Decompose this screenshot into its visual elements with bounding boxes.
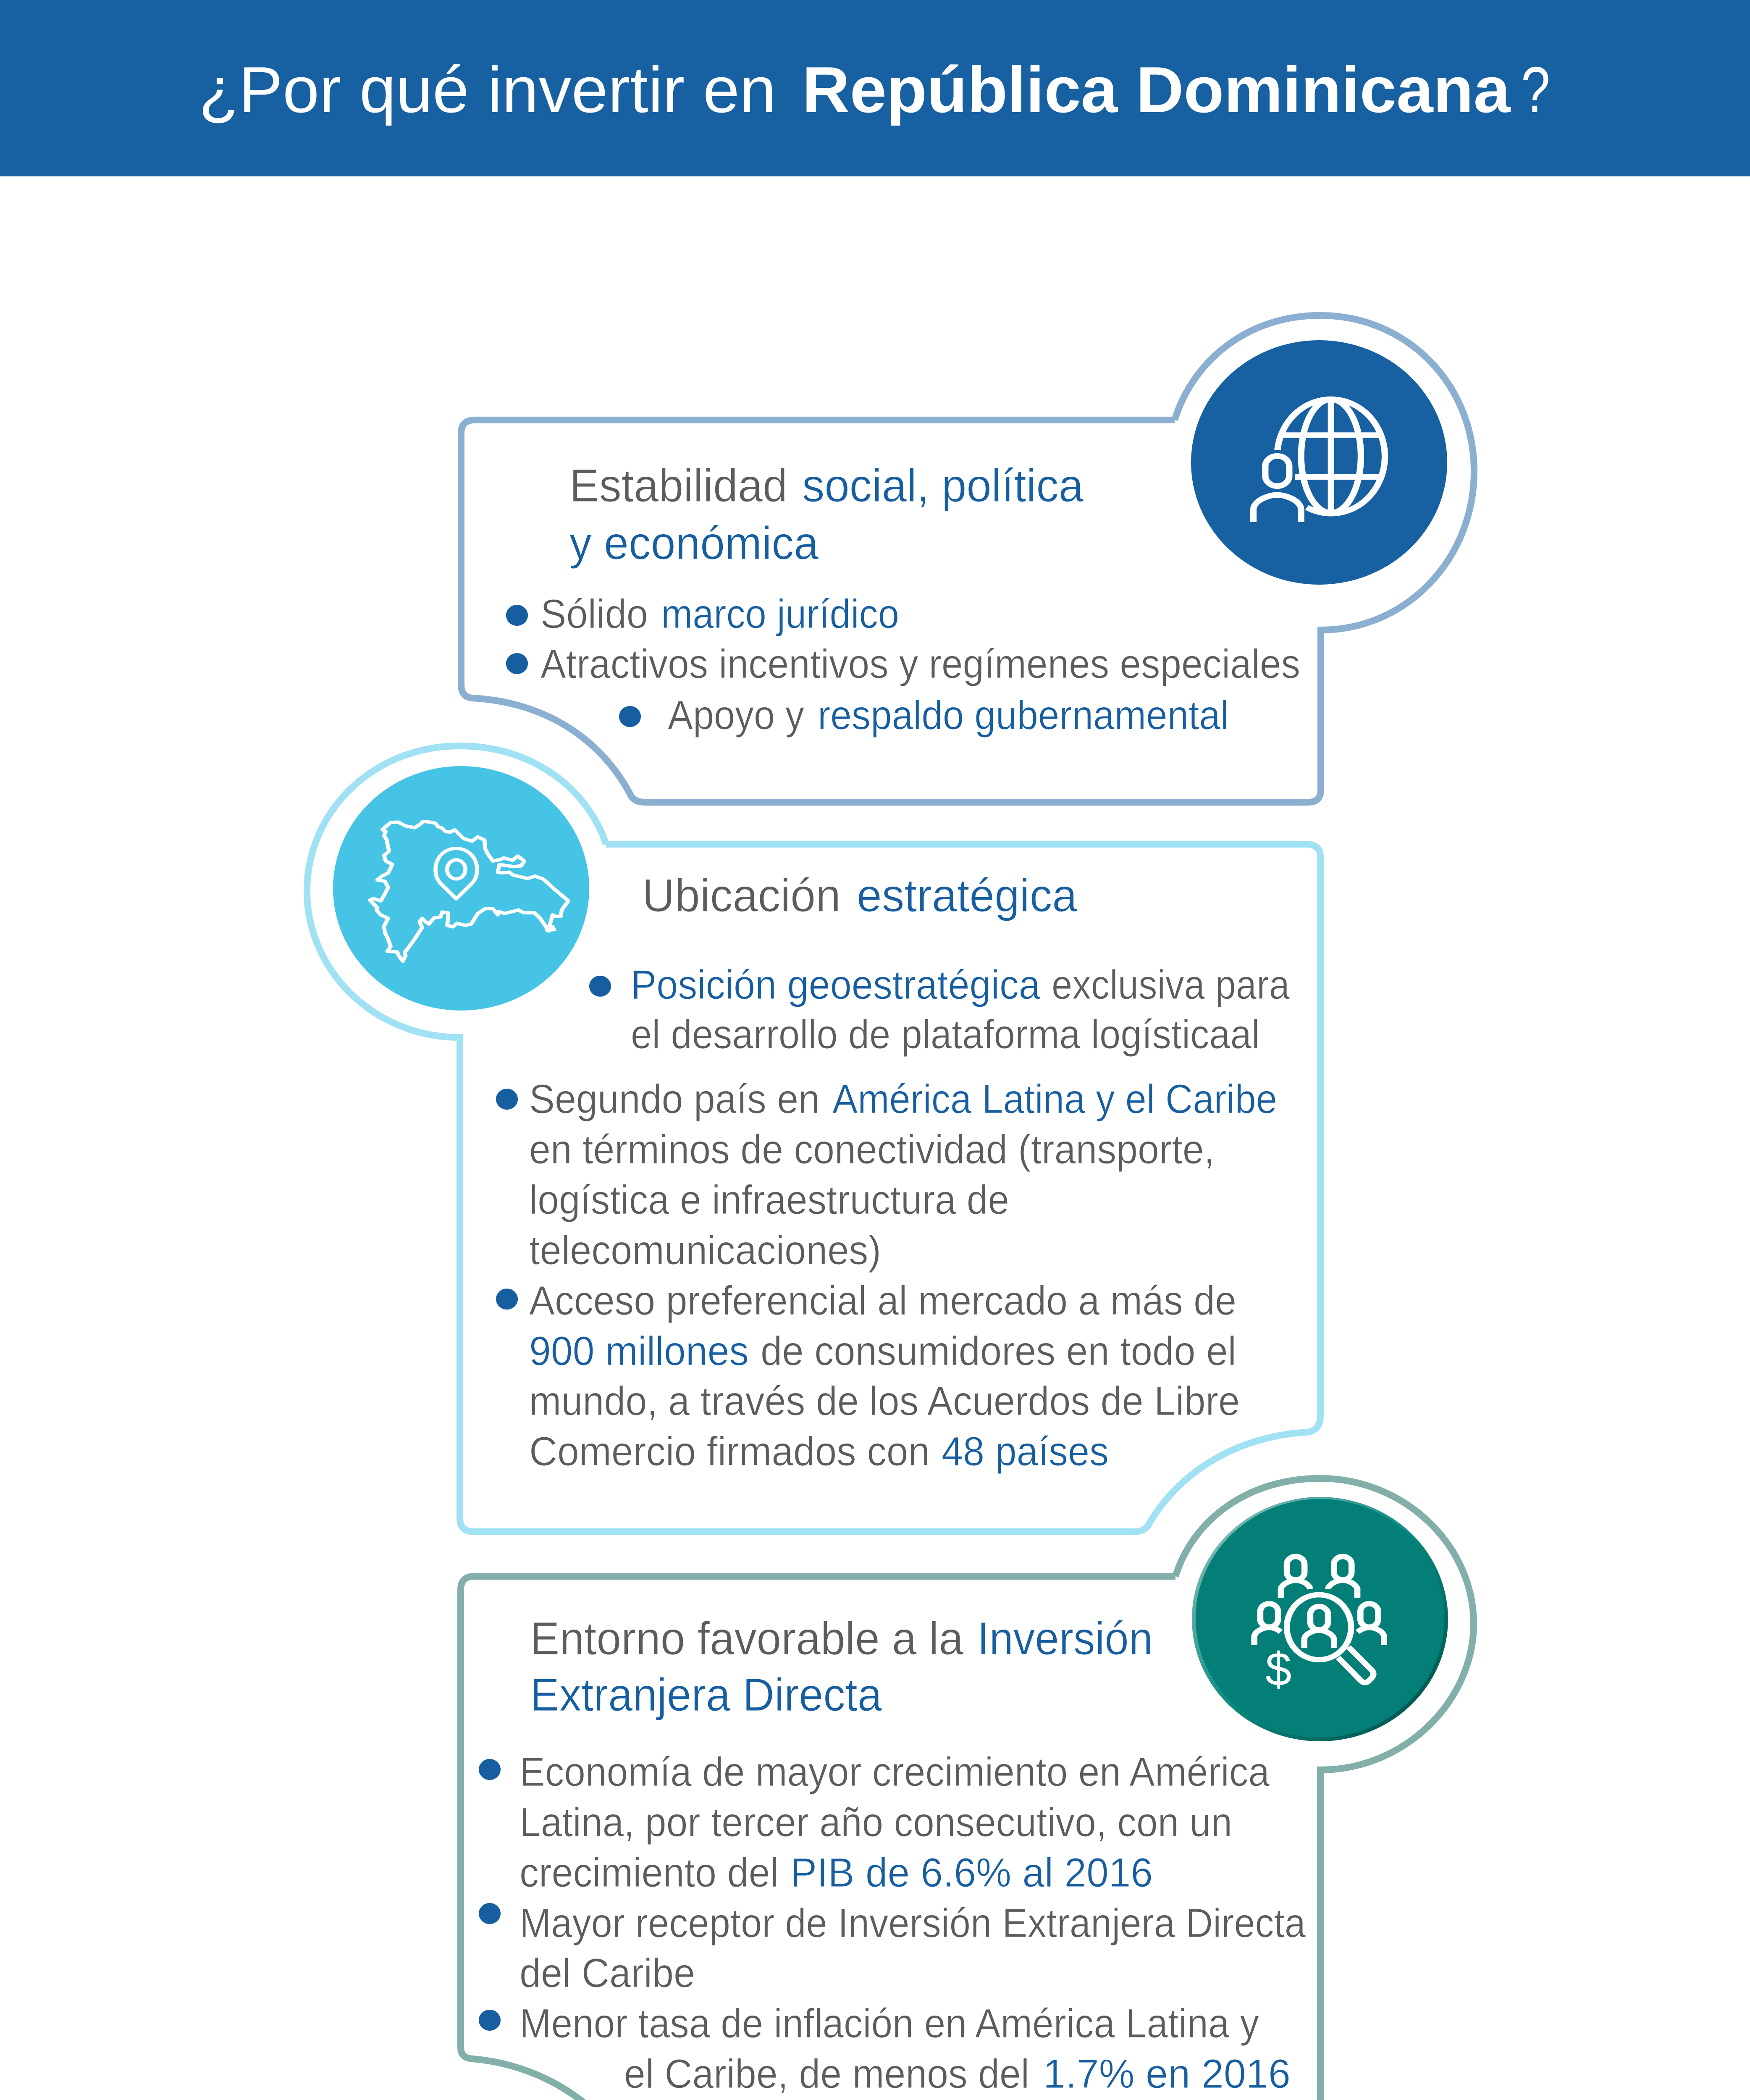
bullet list: Economía de mayor crecimiento en América bbox=[519, 1749, 1270, 1795]
header banner bbox=[0, 0, 1750, 176]
bullet list: Atractivos incentivos y regímenes especiales bbox=[540, 641, 1300, 687]
bullet list: Sólido bbox=[540, 591, 648, 637]
panel outline bbox=[461, 315, 1474, 802]
bullet list: Menor tasa de inflación en América Latina y bbox=[519, 2000, 1259, 2046]
bullet list: de consumidores en todo el bbox=[761, 1328, 1236, 1374]
bullet list: Comercio firmados con bbox=[529, 1428, 930, 1474]
icon: map with pin bbox=[370, 822, 568, 961]
bullet list: crecimiento del bbox=[519, 1850, 779, 1895]
panel: ubicación bbox=[307, 746, 1320, 1532]
bullet list: respaldo gubernamental bbox=[818, 692, 1229, 738]
heading bbox=[642, 870, 1078, 921]
bullet list: 900 millones bbox=[529, 1328, 749, 1374]
icon circle bbox=[1191, 340, 1447, 585]
bullet list: marco jurídico bbox=[661, 591, 899, 637]
title: República Dominicana bbox=[802, 53, 1511, 126]
bullet list: el Caribe, de menos del bbox=[624, 2051, 1029, 2097]
heading: Ubicación bbox=[642, 870, 841, 921]
icon: people with magnifier and dollar bbox=[1254, 1557, 1384, 1696]
bullet list bbox=[479, 1749, 1306, 2097]
bullet list: Acceso preferencial al mercado a más de bbox=[529, 1278, 1236, 1323]
panel outline bbox=[461, 1478, 1474, 2100]
bullet list bbox=[496, 962, 1290, 1474]
bullet list: América Latina y el Caribe bbox=[832, 1076, 1277, 1122]
title: ? bbox=[1521, 53, 1550, 126]
heading: Entorno favorable a la bbox=[530, 1613, 964, 1664]
bullet list: telecomunicaciones) bbox=[529, 1227, 881, 1273]
bullet list: Segundo país en bbox=[529, 1076, 820, 1122]
bullet list bbox=[506, 591, 1300, 738]
heading: Estabilidad bbox=[569, 460, 787, 512]
bullet list: exclusiva para bbox=[1052, 962, 1290, 1008]
bullet list: 48 países bbox=[942, 1428, 1109, 1474]
bullet list: PIB de 6.6% al 2016 bbox=[790, 1850, 1153, 1895]
bullet list: Apoyo y bbox=[668, 692, 804, 738]
icon: people with magnifier and dollar: $ bbox=[1265, 1643, 1291, 1696]
heading: y económica bbox=[569, 517, 819, 569]
heading: estratégica bbox=[857, 870, 1078, 921]
heading bbox=[530, 1613, 1153, 1721]
title bbox=[199, 53, 1550, 126]
icon circle bbox=[333, 766, 589, 1011]
bullet list: el desarrollo de plataforma logísticaal bbox=[631, 1011, 1260, 1057]
icon: globe with person bbox=[1253, 399, 1385, 522]
title: ¿Por qué invertir en bbox=[199, 53, 776, 126]
bullet list: del Caribe bbox=[519, 1950, 695, 1996]
heading: Extranjera Directa bbox=[530, 1669, 882, 1721]
bullet list: mundo, a través de los Acuerdos de Libre bbox=[529, 1378, 1240, 1424]
panel: entorno favorable bbox=[461, 1478, 1474, 2100]
bullet list: en términos de conectividad (transporte, bbox=[529, 1126, 1215, 1172]
panel: estabilidad bbox=[461, 315, 1474, 802]
bullet list: Latina, por tercer año consecutivo, con un bbox=[519, 1799, 1232, 1845]
bullet list: Mayor receptor de Inversión Extranjera Directa bbox=[519, 1900, 1306, 1946]
heading: Inversión bbox=[977, 1613, 1153, 1664]
heading bbox=[569, 460, 1084, 569]
bullet list: 1.7% en 2016 bbox=[1043, 2051, 1291, 2097]
heading: social, política bbox=[802, 460, 1084, 512]
panel outline bbox=[307, 746, 1320, 1532]
bullet list: Posición geoestratégica bbox=[631, 962, 1040, 1008]
bullet list: logística e infraestructura de bbox=[529, 1177, 1009, 1223]
icon circle bbox=[1192, 1497, 1448, 1741]
